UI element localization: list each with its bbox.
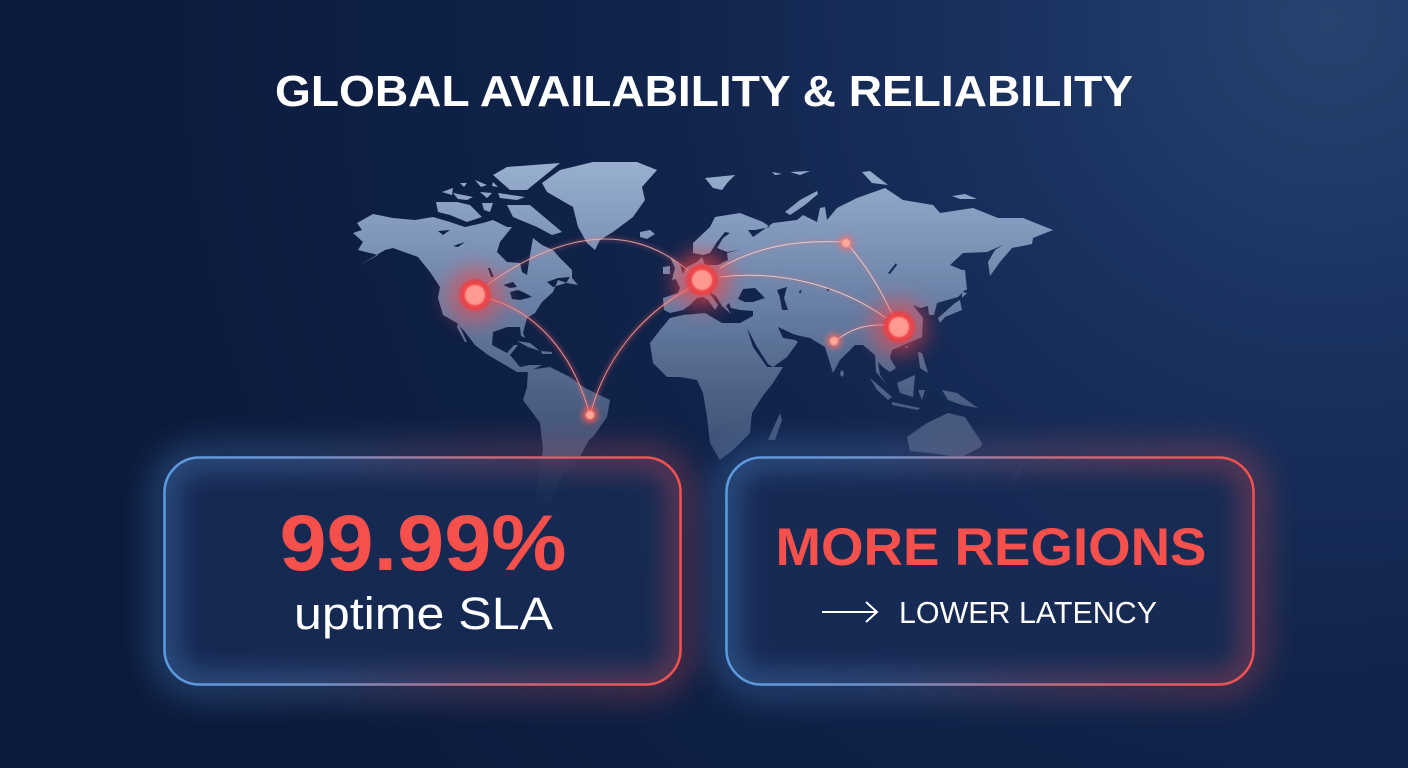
map: British Isles and Iceland xyxy=(640,230,684,280)
panel: more regions xyxy=(725,456,1255,686)
stat: 99.99%: 99.99% xyxy=(280,498,566,587)
node: Russia xyxy=(838,235,854,251)
arc: Europe to East Asia xyxy=(720,275,886,318)
node: South America xyxy=(582,407,598,423)
node: India xyxy=(826,333,842,349)
panel glow: regions card xyxy=(725,456,1255,686)
label: LOWER LATENCY: LOWER LATENCY xyxy=(899,595,1157,630)
map: Japan xyxy=(938,270,967,323)
map: Madagascar xyxy=(768,413,782,440)
map: Southeast Asia xyxy=(840,346,978,410)
map: Australia and New Zealand xyxy=(907,413,1024,487)
heading: MORE REGIONS: MORE REGIONS xyxy=(776,518,1206,577)
map: Eurasia and Africa xyxy=(650,188,1053,460)
node: North America xyxy=(447,267,503,323)
arc: Russia to East Asia xyxy=(849,246,893,316)
node: Europe xyxy=(674,252,730,308)
panel: uptime SLA xyxy=(163,456,682,686)
title: GLOBAL AVAILABILITY & RELIABILITY xyxy=(275,67,1133,116)
label: uptime SLA: uptime SLA xyxy=(294,588,553,639)
arc: Europe to Russia xyxy=(720,242,843,268)
arc: India to East Asia xyxy=(838,325,885,339)
network connections xyxy=(487,239,893,412)
map: Caribbean xyxy=(517,341,552,354)
map: South America xyxy=(523,367,610,503)
arrow xyxy=(822,602,877,622)
arc: Europe to South America xyxy=(591,288,690,412)
map: Arctic islands xyxy=(436,163,562,235)
map: northern islands xyxy=(705,171,977,215)
arc: North America to Europe xyxy=(487,239,690,285)
world map xyxy=(353,162,1053,503)
map: North America xyxy=(353,214,578,372)
node: East Asia xyxy=(871,299,927,355)
arc: North America to South America xyxy=(487,298,589,412)
panel glow: uptime card xyxy=(163,456,682,686)
map: Greenland xyxy=(542,162,657,250)
